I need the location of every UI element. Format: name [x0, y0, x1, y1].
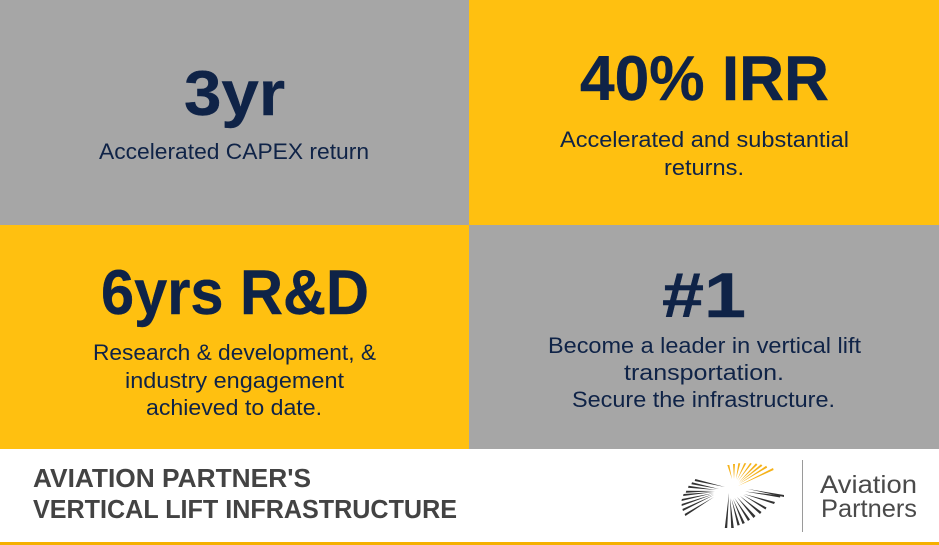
footer title [33, 465, 457, 524]
text: capex description: Accelerated CAPEX return [99, 139, 369, 164]
panel: 6yrs R&D [0, 225, 469, 449]
stat: #1: #1 [662, 261, 746, 331]
text: research description [93, 340, 376, 420]
panel: #1 leader [469, 225, 939, 449]
text: leader description: Become a leader in vertical lift [548, 333, 862, 358]
icon: radiating fan mark [682, 463, 784, 528]
text: leader description: Secure the infrastructure. [572, 387, 835, 412]
panel: 40% IRR [469, 0, 939, 225]
text: research description: achieved to date. [146, 395, 322, 420]
text: leader description: transportation. [624, 360, 784, 385]
text: returns description: Accelerated and substantial [560, 127, 849, 152]
icon: lower dark fan blades [725, 489, 784, 528]
stat: 40% IRR: 40% IRR [580, 44, 829, 114]
footer title: AVIATION PARTNER'S [33, 465, 311, 493]
footer band [0, 449, 939, 545]
logo wordmark: Aviation [820, 471, 917, 499]
text: returns description: returns. [664, 155, 744, 180]
logo wordmark: Partners [821, 495, 917, 523]
stat: 3yr: 3yr [184, 59, 285, 129]
logo divider [802, 460, 803, 532]
stat: 6yrs R&D: 6yrs R&D [101, 258, 369, 328]
icon: left dark fan blades [682, 479, 725, 516]
text: leader description [548, 333, 862, 412]
icon: yellow fan blades [727, 463, 774, 486]
logo wordmark [820, 471, 917, 523]
text: returns description [560, 127, 849, 180]
footer title: VERTICAL LIFT INFRASTRUCTURE [33, 496, 457, 524]
footer accent line [0, 542, 939, 545]
text: research description: industry engagement [125, 368, 345, 393]
text: research description: Research & development, & [93, 340, 376, 365]
panel: 3yr capex return [0, 0, 469, 225]
logo: aviation partners [682, 460, 917, 532]
